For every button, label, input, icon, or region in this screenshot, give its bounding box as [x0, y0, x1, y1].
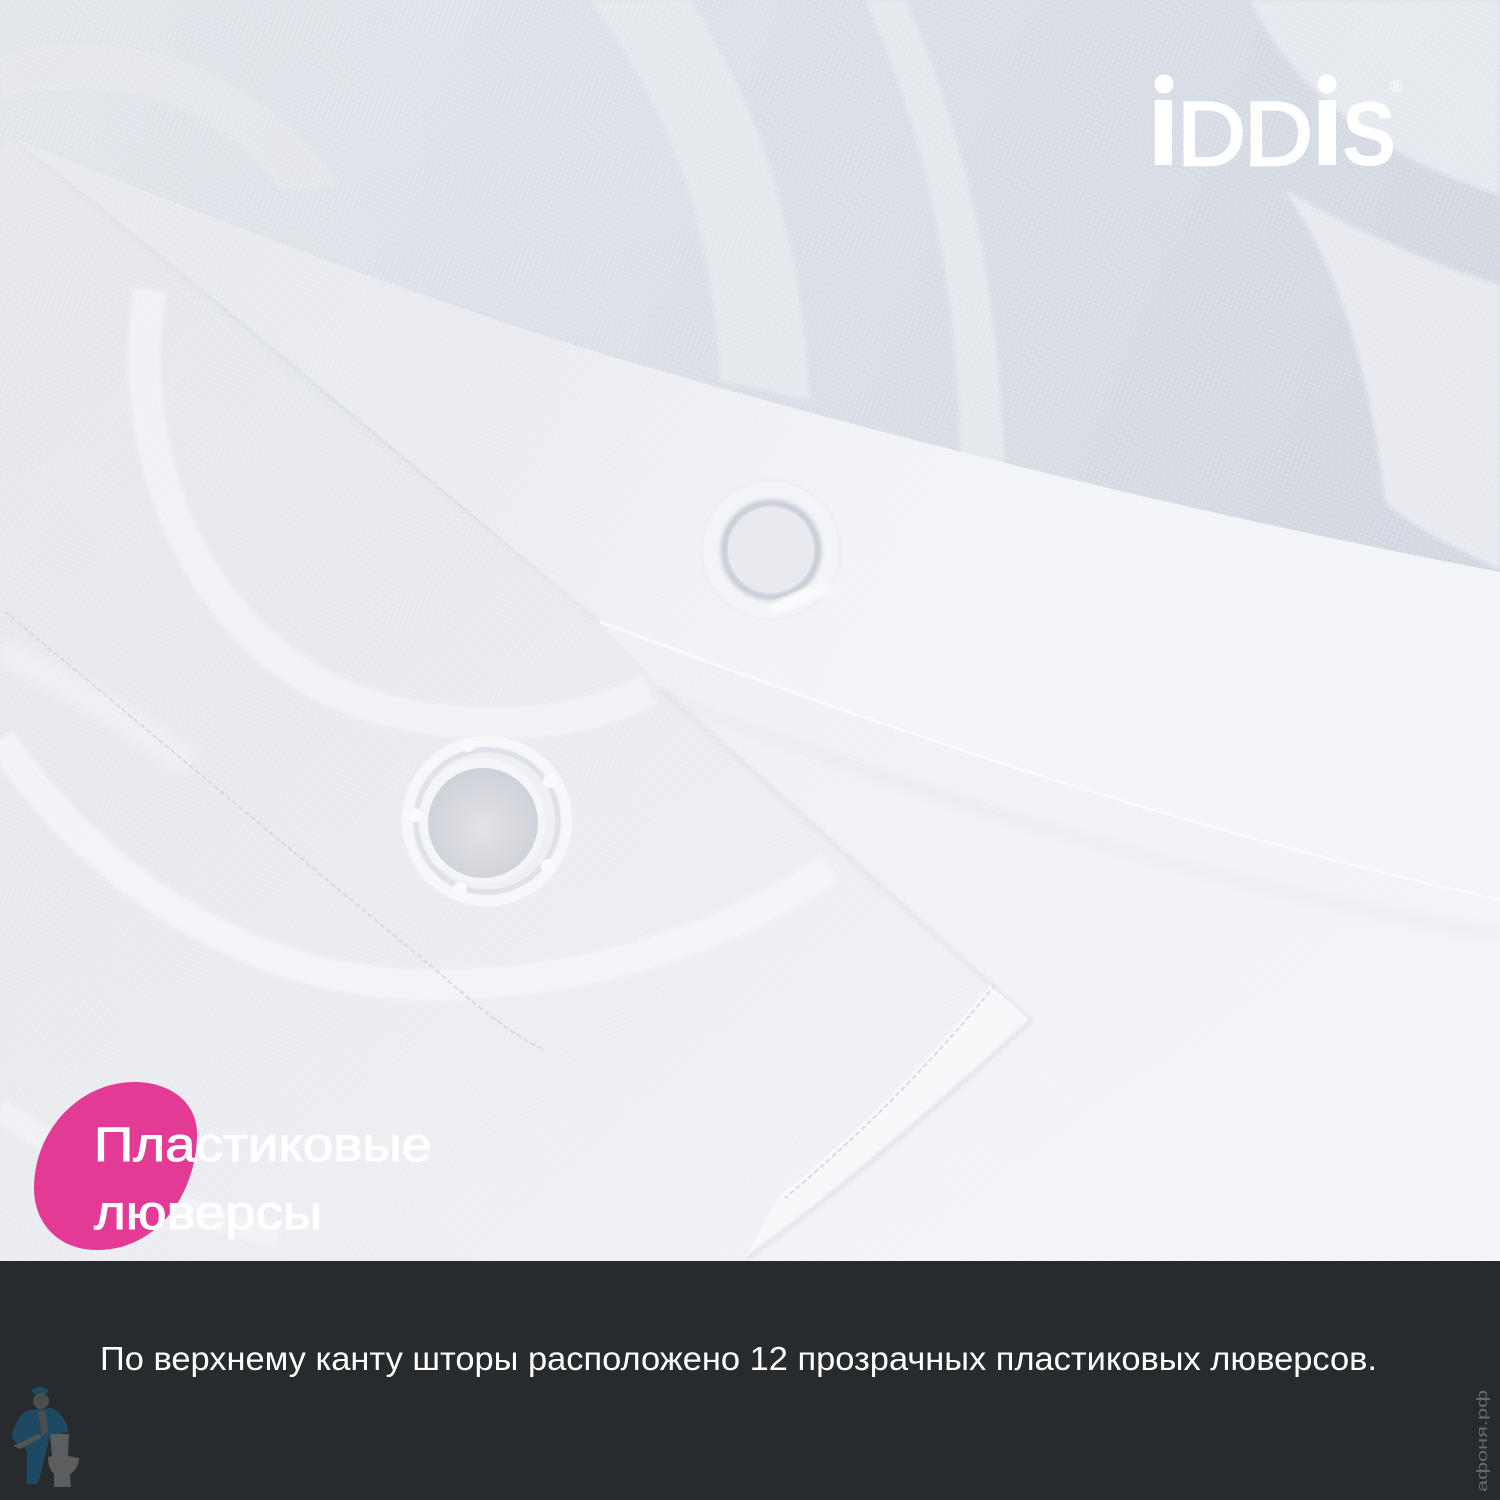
logo: IDDIS — [1154, 74, 1402, 166]
icon: plumber with toilet — [12, 1387, 79, 1487]
logo: IDDIS: i — [1310, 53, 1345, 192]
pink blob accent — [34, 1082, 197, 1250]
heading: люверсы — [94, 1187, 322, 1240]
logo: IDDIS: S — [1342, 84, 1396, 185]
dark footer band — [0, 1261, 1500, 1500]
logo: IDDIS: D — [1244, 84, 1313, 185]
logo: IDDIS: D — [1177, 84, 1246, 185]
lower fabric — [600, 622, 1500, 1261]
footer description: По верхнему канту шторы расположено 12 прозрачных пластиковых люверсов. — [100, 1340, 1377, 1377]
logo: IDDIS: ® — [1390, 77, 1403, 96]
folded curtain panel — [0, 355, 1004, 1261]
logo: IDDIS: i — [1146, 53, 1181, 192]
upper grommet — [719, 498, 824, 610]
woven arc on panel — [130, 290, 430, 730]
hem stitched edge — [600, 622, 1500, 900]
heading: Пластиковые — [94, 1119, 432, 1172]
lower grommet — [401, 735, 573, 907]
lower left tab — [0, 612, 1032, 1258]
heading — [94, 1119, 432, 1240]
watermark: афоня.рф — [1474, 1390, 1491, 1492]
top hem with grommet — [146, 200, 1500, 898]
